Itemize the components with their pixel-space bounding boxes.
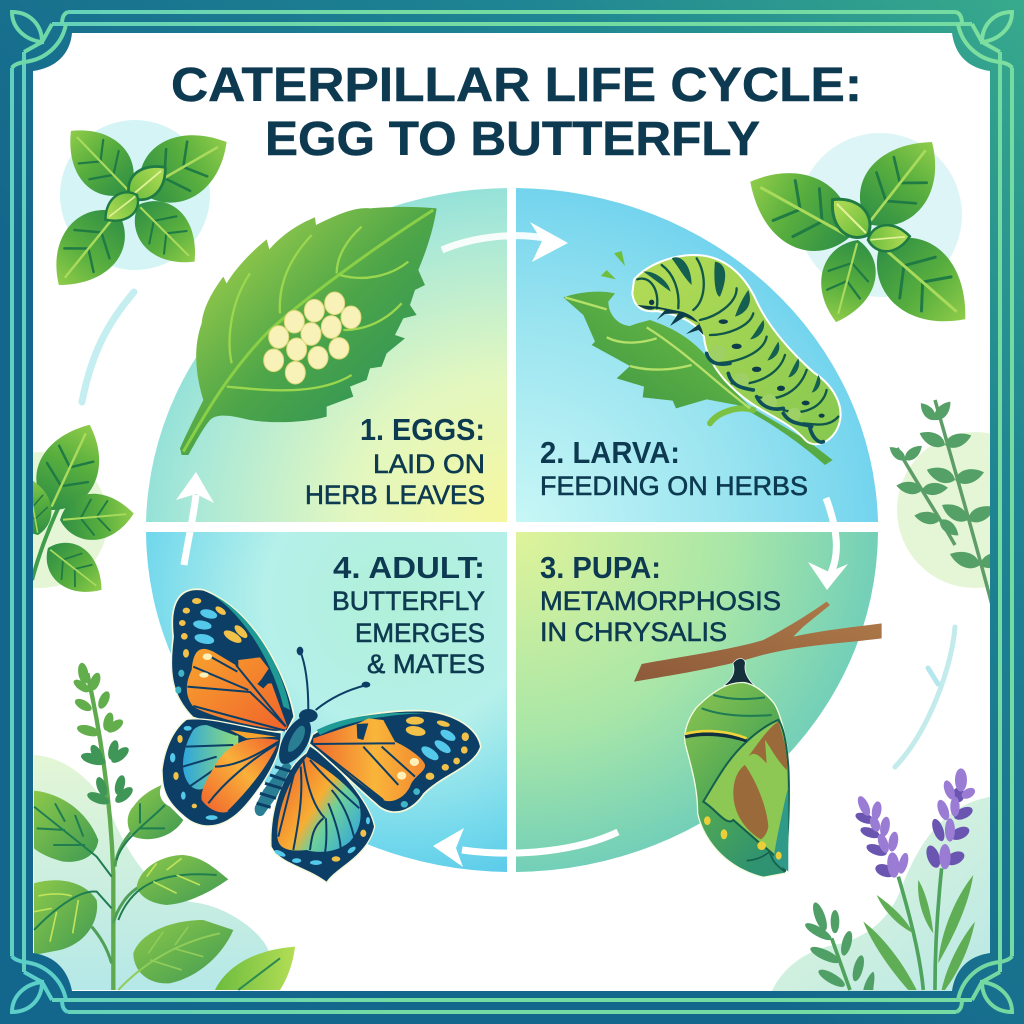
left herb (10, 412, 136, 606)
decorative pale arcs (82, 292, 955, 767)
body (255, 760, 292, 816)
label: 4 adult (332, 550, 485, 679)
illustration: caterpillar on leaf (563, 251, 840, 465)
bottom-left herb (34, 662, 295, 990)
right thyme herb (887, 398, 1011, 605)
body (633, 256, 840, 443)
bottom-right lavender (803, 768, 977, 990)
label: 4 adult: & MATES (367, 649, 485, 679)
illustration: leaf with eggs (180, 207, 437, 455)
cycle arrows (176, 222, 848, 867)
label: 2 larva (540, 435, 808, 501)
label: 3 pupa (540, 550, 781, 647)
title (171, 59, 862, 166)
lower right wing (272, 747, 374, 882)
arrow: adult to eggs (176, 472, 214, 565)
label: 3 pupa: METAMORPHOSIS (540, 586, 781, 616)
label: 2 larva: 2. LARVA: (540, 435, 680, 470)
top-left herb (36, 113, 242, 304)
illustration: branch and chrysalis (634, 602, 882, 877)
label: 1 eggs: LAID ON (373, 449, 485, 479)
label: 4 adult: BUTTERFLY (332, 586, 485, 616)
illustration: butterfly (163, 590, 480, 882)
label: 3 pupa: IN CHRYSALIS (540, 617, 727, 647)
label: 1 eggs: HERB LEAVES (305, 480, 485, 510)
label: 2 larva: FEEDING ON HERBS (540, 471, 808, 501)
title: CATERPILLAR LIFE CYCLE: (171, 59, 862, 112)
label: 4 adult: EMERGES (355, 618, 485, 648)
quadrant 2 background (516, 188, 878, 522)
arrow: pupa to adult (433, 828, 618, 867)
white cross dividers (144, 186, 880, 874)
hook (725, 659, 755, 687)
lower left wing (163, 719, 281, 825)
arrow: eggs to larva (442, 222, 568, 262)
label: 3 pupa: 3. PUPA: (540, 550, 661, 585)
label: 4 adult: 4. ADULT: (333, 550, 485, 585)
quadrant 1 background (146, 188, 508, 522)
title: EGG TO BUTTERFLY (265, 113, 760, 166)
top-right herb (733, 122, 989, 345)
arrow: larva to pupa (808, 498, 848, 590)
upper left wing (172, 590, 293, 731)
quadrant 3 background (516, 532, 878, 872)
cycle circle: four quadrants (146, 188, 878, 872)
branch (634, 602, 882, 682)
chrysalis body (685, 683, 789, 877)
eggs cluster (264, 292, 361, 384)
upper right wing (310, 711, 480, 811)
quadrant 4 background (146, 532, 508, 872)
half-eaten leaf (563, 292, 833, 465)
label: 1 eggs: 1. EGGS: (360, 412, 485, 447)
label: 1 eggs (305, 412, 485, 510)
